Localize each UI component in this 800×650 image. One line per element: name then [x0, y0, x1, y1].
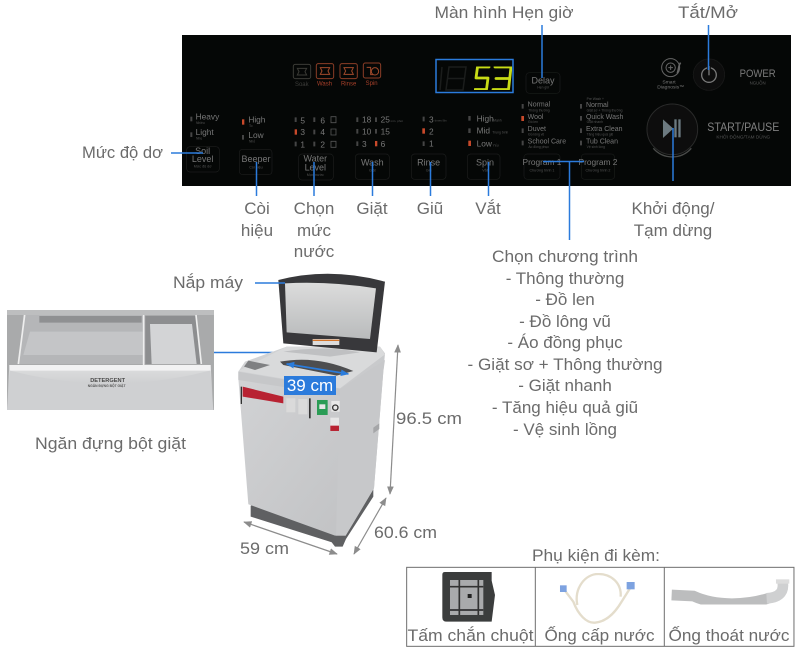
left button groups: Spin	[476, 157, 494, 167]
label: wash: Giặt	[356, 199, 388, 218]
left button groups: Low	[248, 130, 265, 140]
text block: program list: Chọn chương trình	[492, 247, 638, 266]
left button groups: 3	[362, 139, 367, 149]
photo: detergent drawer: NGĂN ĐỰNG BỘT GIẶT	[88, 383, 126, 388]
left button groups: High	[248, 114, 266, 124]
right button groups: Quick Wash	[586, 114, 623, 121]
left button groups: Heavy	[196, 111, 220, 121]
right button groups: Pre Wash +	[587, 97, 604, 101]
right button groups: Giặt sơ + Thông thường	[587, 109, 623, 113]
label: detergent drawer: Ngăn đựng bột giặt	[35, 434, 186, 453]
right button groups: Duvet	[528, 126, 546, 133]
icon: drain hose	[672, 579, 789, 604]
text block: program list: - Đồ lông vũ	[519, 312, 611, 331]
left button groups: Trung bình	[492, 131, 508, 135]
label: water level: mức	[297, 221, 332, 240]
power and start controls: KHỞI ĐỘNG/TẠM DỪNG	[716, 133, 771, 139]
text block: program list	[468, 247, 662, 439]
table: accessories	[407, 567, 794, 646]
button outlines	[187, 147, 500, 180]
left button groups: 1	[429, 139, 434, 149]
left button groups: Soil	[195, 146, 210, 156]
right button groups: Giặt nhanh	[587, 120, 603, 124]
right button groups: Tăng hiệu quả giũ	[587, 133, 613, 137]
accessory names: Tấm chắn chuột	[408, 626, 534, 645]
left button groups: Nhỏ	[249, 140, 255, 144]
left button groups: Giặt	[369, 169, 376, 173]
panel: control panel	[182, 35, 791, 186]
power and start controls: Diagnosis™	[657, 85, 684, 91]
left button groups: times lần	[435, 119, 447, 123]
label: spin: Vắt	[475, 199, 501, 218]
power and start controls: START/PAUSE	[707, 121, 779, 134]
left button groups: Mực nước	[307, 173, 324, 177]
power and start controls: Smart	[662, 79, 676, 85]
right button groups: Delay	[532, 75, 555, 85]
text block: program list: - Giặt sơ + Thông thường	[468, 355, 662, 374]
label: height: 96.5 cm	[396, 409, 462, 428]
label: beeper: Còi	[244, 199, 270, 218]
left button groups: Level	[192, 154, 213, 164]
left button groups: Mạnh	[493, 118, 502, 122]
timer display	[436, 60, 513, 92]
right button groups: Chương trình 2	[586, 169, 610, 173]
left button groups: Mức độ dơ	[194, 165, 212, 169]
left button groups: Rinse	[417, 157, 440, 167]
right button groups: Đồ lông vũ	[528, 133, 544, 137]
label: start pause	[632, 199, 715, 240]
label: water level: Chọn	[294, 199, 334, 218]
left button groups: To	[249, 124, 253, 128]
left button groups: Còi hiệu	[249, 166, 263, 170]
left button groups: 6	[381, 139, 386, 149]
left button groups: Water	[303, 153, 327, 163]
text block: program list: - Thông thường	[506, 269, 624, 288]
right button groups: Extra Clean	[586, 126, 623, 133]
labels on machine	[243, 387, 283, 403]
right button groups: Đồ len	[528, 120, 538, 124]
left button groups: Nhiều	[196, 121, 205, 125]
left button groups: Level	[305, 163, 326, 173]
label: depth: 60.6 cm	[374, 523, 437, 542]
left button groups: Beeper	[242, 154, 270, 164]
left button groups: High	[477, 113, 494, 123]
arrow: depth	[354, 498, 386, 554]
accessory names: Ống cấp nước	[544, 625, 655, 645]
left button groups: 15	[381, 127, 390, 137]
text block: program list: - Vệ sinh lồng	[513, 420, 617, 439]
label: rinse: Giũ	[417, 199, 443, 218]
left button groups: 3	[429, 114, 434, 124]
left button groups: 18	[362, 115, 372, 125]
right button groups: Thông thường	[528, 108, 550, 112]
callout line: detergent	[214, 352, 325, 354]
right button groups	[521, 73, 623, 179]
right button groups: Wool	[528, 114, 544, 121]
right button groups: Áo đồng phục	[528, 145, 549, 149]
left button groups: 3	[300, 127, 305, 137]
lid	[278, 274, 385, 352]
left button groups: 2	[429, 127, 434, 137]
icon: rodent guard	[442, 572, 495, 622]
callout lines: control panel	[171, 25, 708, 240]
left button groups: 2	[320, 139, 325, 149]
right button groups: Hẹn giờ	[537, 85, 550, 89]
right button groups: Normal	[528, 102, 551, 109]
icon: inlet hose	[560, 574, 635, 623]
text block: program list: - Đồ len	[535, 290, 595, 309]
text block: program list: - Tăng hiệu quả giũ	[492, 398, 638, 417]
left button groups: Mid	[477, 126, 490, 136]
power and start controls: POWER	[740, 68, 776, 80]
right button groups: Program 2	[579, 157, 618, 167]
heading: accessories: Phụ kiện đi kèm:	[532, 546, 660, 565]
right button groups: Chương trình 1	[530, 169, 554, 173]
label: lid: Nắp máy	[173, 273, 244, 292]
right button groups: Program 1	[523, 157, 562, 167]
label: beeper	[241, 199, 273, 240]
right button groups: Vệ sinh lồng	[587, 145, 605, 149]
right button groups: School Care	[528, 138, 566, 145]
left button groups: 1	[300, 139, 305, 149]
left button groups: 25	[381, 114, 390, 124]
left button groups: Wash	[361, 157, 384, 167]
left button groups: Giũ	[426, 169, 431, 173]
arrow: height	[390, 345, 398, 494]
right button groups: Normal	[586, 102, 609, 109]
label: width: 59 cm	[240, 539, 289, 558]
left button groups: 10	[362, 127, 372, 137]
arrow: width	[244, 522, 337, 554]
photo: detergent drawer	[7, 310, 214, 410]
text block: program list: - Áo đồng phục	[507, 333, 623, 352]
photo: detergent drawer: DETERGENT	[90, 378, 126, 384]
photo: washing machine	[238, 274, 385, 547]
callout line: lid	[255, 282, 285, 284]
left button groups: 4	[320, 127, 325, 137]
width badge: 39 cm	[287, 376, 333, 395]
cycle status icons	[293, 63, 381, 88]
inner arrow	[287, 364, 348, 374]
label: timer screen: Màn hình Hẹn giờ	[434, 3, 574, 22]
left button groups: Yếu	[493, 143, 499, 147]
machine base	[251, 487, 373, 547]
left button groups: Vắt	[482, 168, 488, 173]
cycle status icons: Spin	[366, 81, 378, 87]
left button groups: 6	[320, 115, 325, 125]
label: water level: nước	[294, 242, 335, 261]
label: start pause: Tạm dừng	[634, 221, 712, 240]
label: power: Tắt/Mở	[678, 3, 738, 22]
label: soil level: Mức độ dơ	[82, 143, 163, 162]
label: water level	[294, 199, 335, 261]
label: start pause: Khởi động/	[632, 199, 715, 218]
cycle status icons: Soak	[295, 82, 309, 88]
left button groups: Nhẹ	[196, 137, 202, 141]
label: beeper: hiệu	[241, 221, 273, 240]
accessory names	[408, 625, 790, 645]
accessory names: Ống thoát nước	[668, 625, 790, 645]
right button groups: Tub Clean	[586, 138, 618, 145]
cycle status icons: Wash	[317, 82, 332, 88]
left button groups	[187, 111, 508, 180]
left button groups: Low	[477, 138, 493, 148]
left button groups: Light	[196, 127, 214, 137]
left button groups: 5	[300, 115, 305, 125]
cycle status icons: Rinse	[341, 81, 357, 87]
power and start controls: NGUỒN	[750, 81, 766, 86]
power and start controls	[647, 59, 779, 157]
text block: program list: - Giặt nhanh	[518, 376, 612, 395]
machine body	[238, 347, 385, 536]
left button groups: min. phút	[391, 119, 403, 123]
